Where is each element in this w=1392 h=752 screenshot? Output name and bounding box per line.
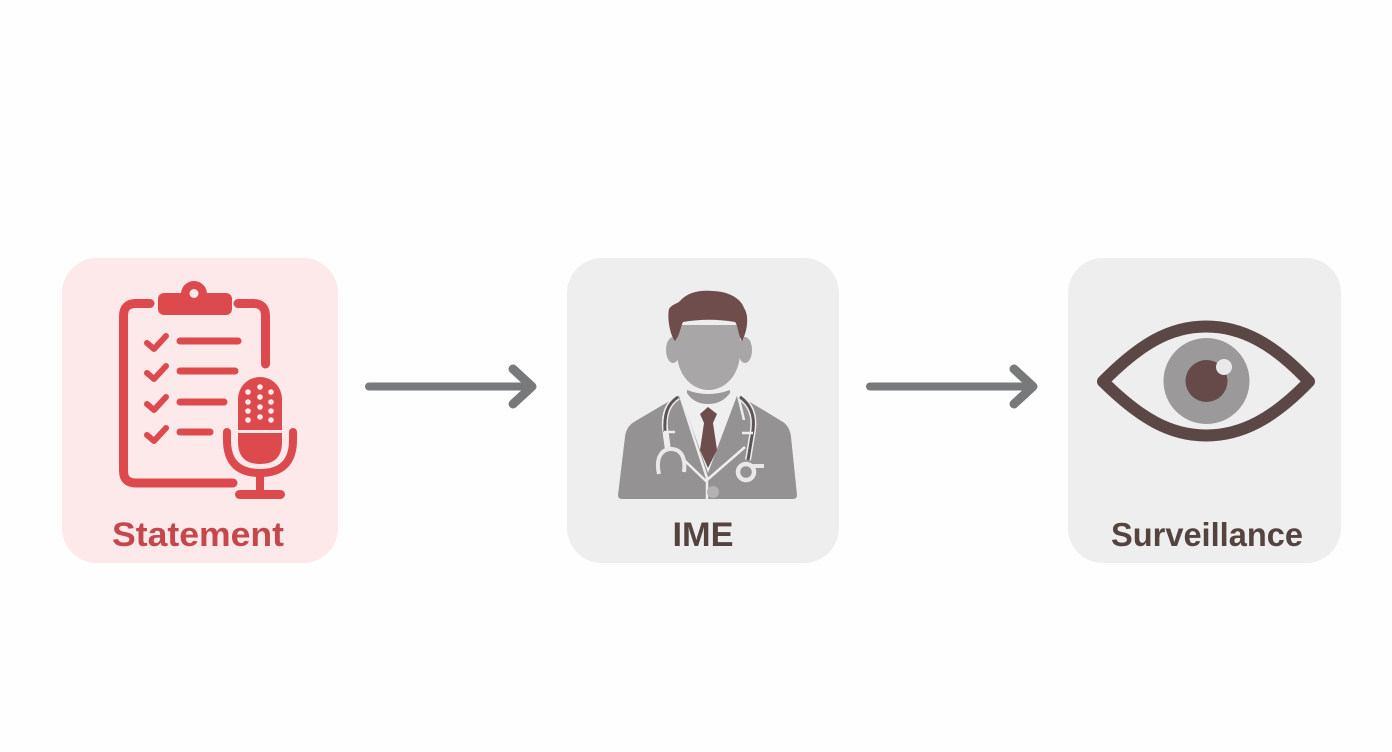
label: IME: IME (672, 516, 734, 554)
coat button (707, 486, 719, 498)
shirt (680, 393, 738, 473)
panel: surveillance (1068, 258, 1341, 563)
neck (687, 390, 730, 404)
stethoscope earpiece (658, 449, 684, 474)
body (618, 396, 797, 499)
face (677, 325, 740, 390)
icon: eye (1103, 326, 1309, 436)
panel: statement (62, 258, 338, 563)
label: Surveillance: Surveillance (1111, 516, 1303, 553)
lapel outline (680, 395, 745, 499)
arrow: IME to surveillance (870, 369, 1033, 404)
hair (668, 291, 747, 341)
tie (700, 407, 717, 468)
ears (666, 337, 680, 363)
panel: IME (567, 258, 839, 563)
arrow: statement to IME (369, 369, 532, 404)
icon: doctor (618, 291, 797, 499)
icon: clipboard with microphone (124, 281, 293, 499)
stethoscope chest piece (738, 464, 754, 480)
stethoscope tubes (665, 397, 678, 450)
label: Statement: Statement (112, 516, 284, 554)
